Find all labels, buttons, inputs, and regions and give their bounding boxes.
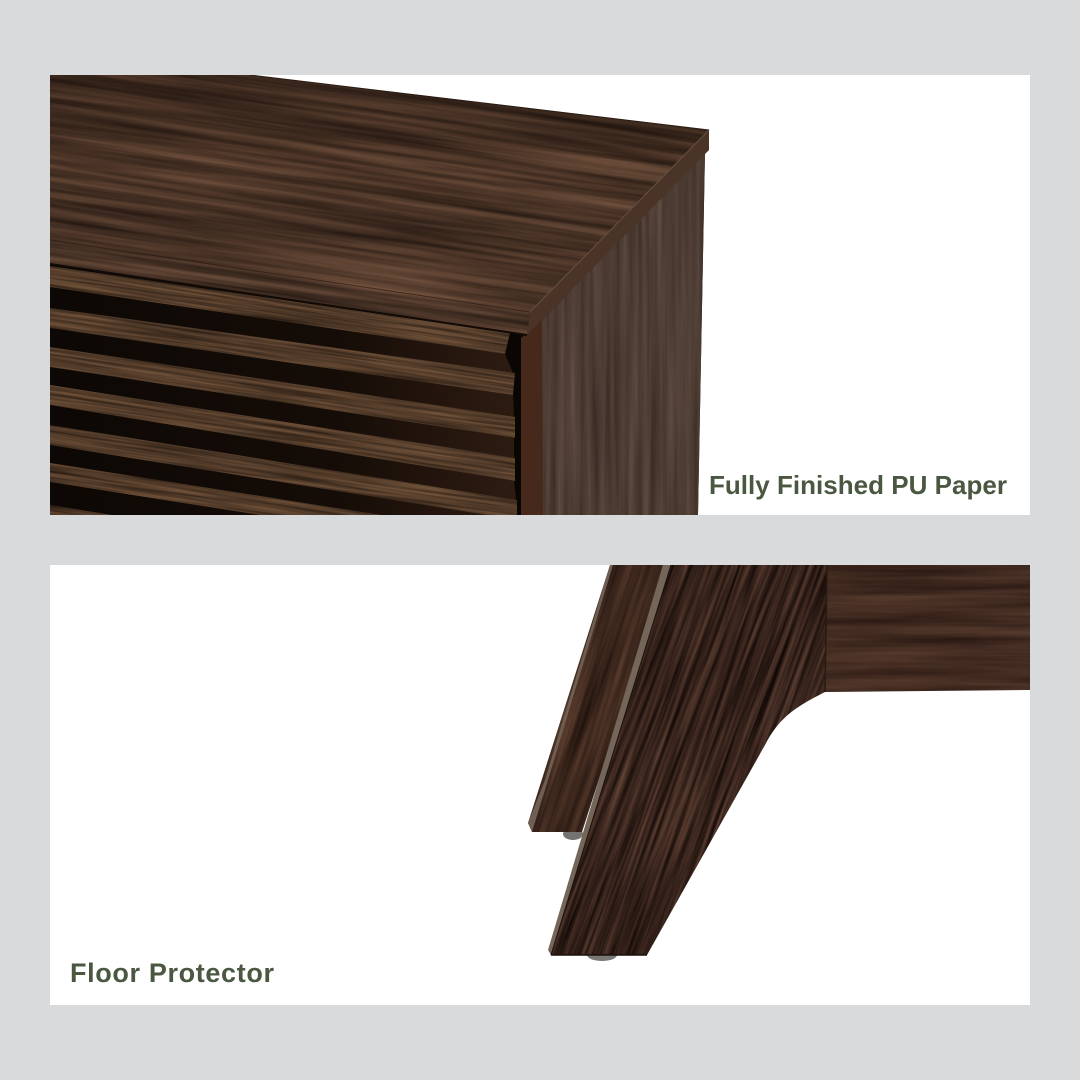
panel: floor protector [50,565,1030,1005]
inner side strip [521,320,543,515]
label: floor protector: Floor Protector [70,958,274,988]
top side lip [527,130,709,335]
top front lip [50,240,530,334]
slat top faces [226,314,516,515]
icon: front floor protector [587,956,617,961]
side panel [542,155,705,515]
slat front faces [50,266,517,515]
photo: cabinet corner [50,75,710,515]
panel: fully finished PU paper [50,75,1030,515]
front leg [552,565,826,955]
icon: rear floor protector [563,832,583,840]
table top surface [50,75,706,312]
front leg edge [548,565,671,955]
rear leg [528,565,663,832]
label: fully finished PU paper: Fully Finished PU Paper [709,470,1007,500]
rail [826,565,1030,692]
slat recess backdrop [50,263,530,515]
photo: cabinet leg [528,565,1030,961]
